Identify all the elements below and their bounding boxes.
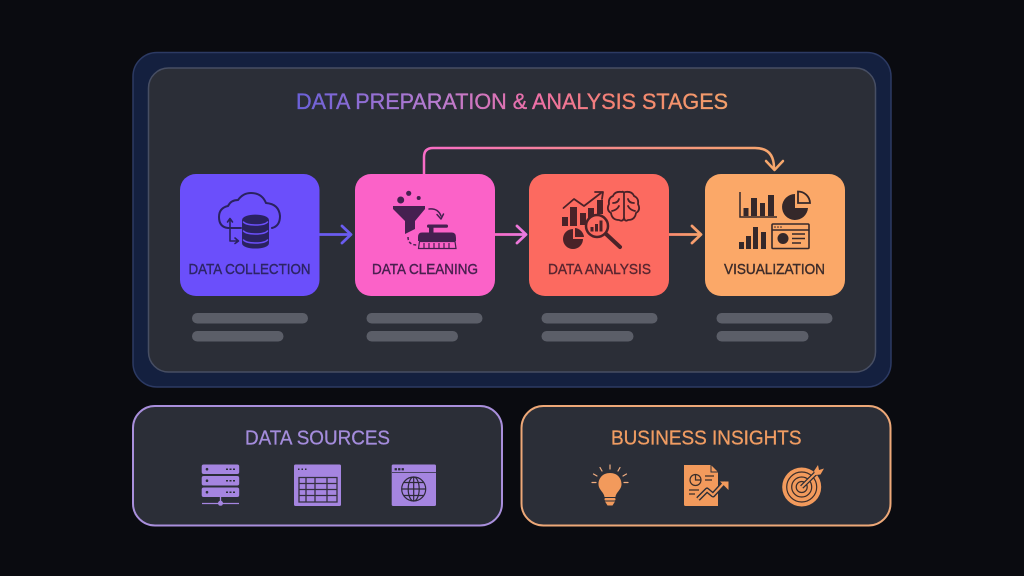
title: DATA PREPARATION & ANALYSIS STAGES [296,89,728,114]
card background [180,174,320,296]
card background [705,174,845,296]
icon: globe window [392,464,436,506]
placeholder text lines: analysis [542,313,658,342]
icon: server stack [202,464,239,506]
label: DATA CLEANING [372,262,478,278]
icon: charts, magnifier and brain [562,192,639,249]
stage card: data analysis [529,174,669,296]
label: DATA ANALYSIS [548,262,651,278]
panel frame [133,406,502,526]
icon: data table window [294,464,341,506]
outer panel frame [133,52,891,387]
icon: funnel and brush [393,191,456,248]
arrow: cleaning to visualization [424,148,783,174]
inner panel [148,68,876,372]
icon: report with growth arrow [684,465,728,506]
label: DATA COLLECTION [188,262,310,278]
heading: BUSINESS INSIGHTS [611,426,802,450]
card background [529,174,669,296]
icon: charts and dashboard [739,191,810,249]
stage card: data collection [180,174,320,296]
arrow: collection to cleaning [319,226,351,243]
panel: data sources [133,406,502,526]
arrow: analysis to visualization [669,226,701,243]
panel: business insights [522,406,890,526]
icon: light bulb [592,465,628,506]
card background [355,174,495,296]
stage card: data cleaning [355,174,495,296]
placeholder text lines: cleaning [366,313,482,342]
panel frame [522,406,890,526]
arrow: cleaning to analysis [495,226,526,243]
stage card: visualization [705,174,845,296]
icon: target with arrow [782,465,824,506]
icon: cloud database [219,193,280,248]
label: VISUALIZATION [724,262,825,278]
placeholder text lines: collection [192,313,308,342]
panel: data preparation and analysis stages [133,52,891,387]
heading: DATA SOURCES [245,426,390,450]
placeholder text lines: visualization [716,313,832,342]
